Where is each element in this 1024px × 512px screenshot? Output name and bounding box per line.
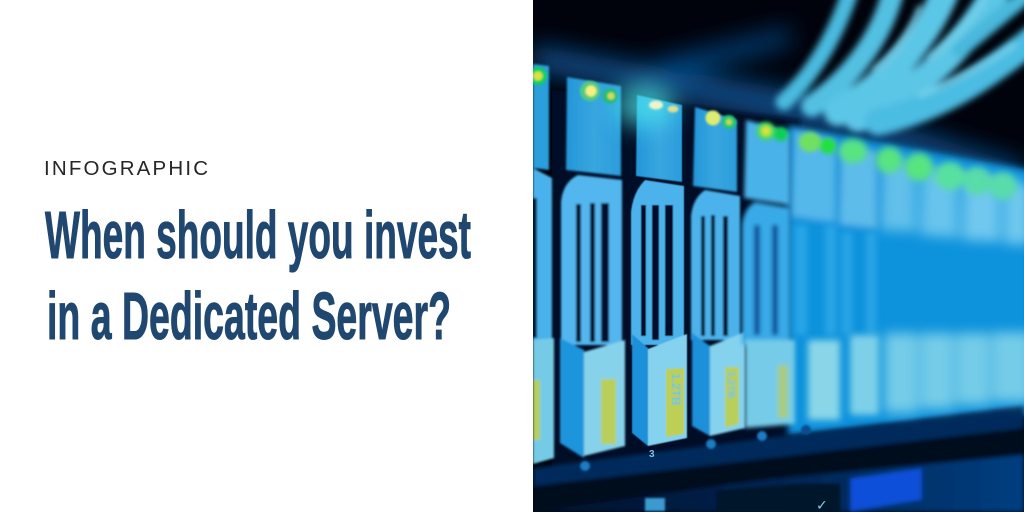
bay number 3: 3 [649,449,655,460]
drive 1 [560,77,625,458]
dark background [533,0,1024,512]
drive 3: 1.2TB [725,371,736,398]
drive 3 handle [691,190,740,340]
shelf and lower rack [533,405,1024,512]
drive 1 tab [566,77,621,176]
drive 2: 1.2TB [669,373,683,406]
black switch panel [717,484,840,512]
title [45,198,471,354]
small port [645,498,665,511]
far bay handles [795,225,876,335]
near far bay tags [808,335,879,420]
eyebrow label: INFOGRAPHIC: INFOGRAPHIC [44,157,208,180]
text panel [44,157,471,354]
LEDs in focus [529,67,736,129]
drive 2 [631,95,687,446]
drive 1 tag [560,338,584,458]
drive 3 tag [692,333,710,436]
drive 4 [742,120,795,428]
drive 2 handle [631,180,684,345]
photo: server rack [533,0,1024,512]
LEDs blurred [757,122,836,154]
drive 0 (cut off) [533,64,554,464]
drive 2 label: 1.2TB [666,368,684,437]
dark gap behind the drives [552,90,800,470]
indicator dots [580,425,811,471]
LED glow [615,83,675,127]
cables [784,0,1024,122]
deep far bay tags [884,332,1024,413]
far bay tabs, deep blur [880,155,1024,245]
drive 2 tab [636,95,682,182]
drive 1 handle [561,175,622,345]
top rack beam [533,28,1024,185]
far server bays, out of focus [788,125,1024,436]
drive 3 [691,107,745,436]
drive 2 tag [632,334,648,446]
cable highlights [875,0,1015,95]
server status lights [529,67,1017,200]
blue display [850,468,922,512]
drive 3 tab [693,107,737,192]
